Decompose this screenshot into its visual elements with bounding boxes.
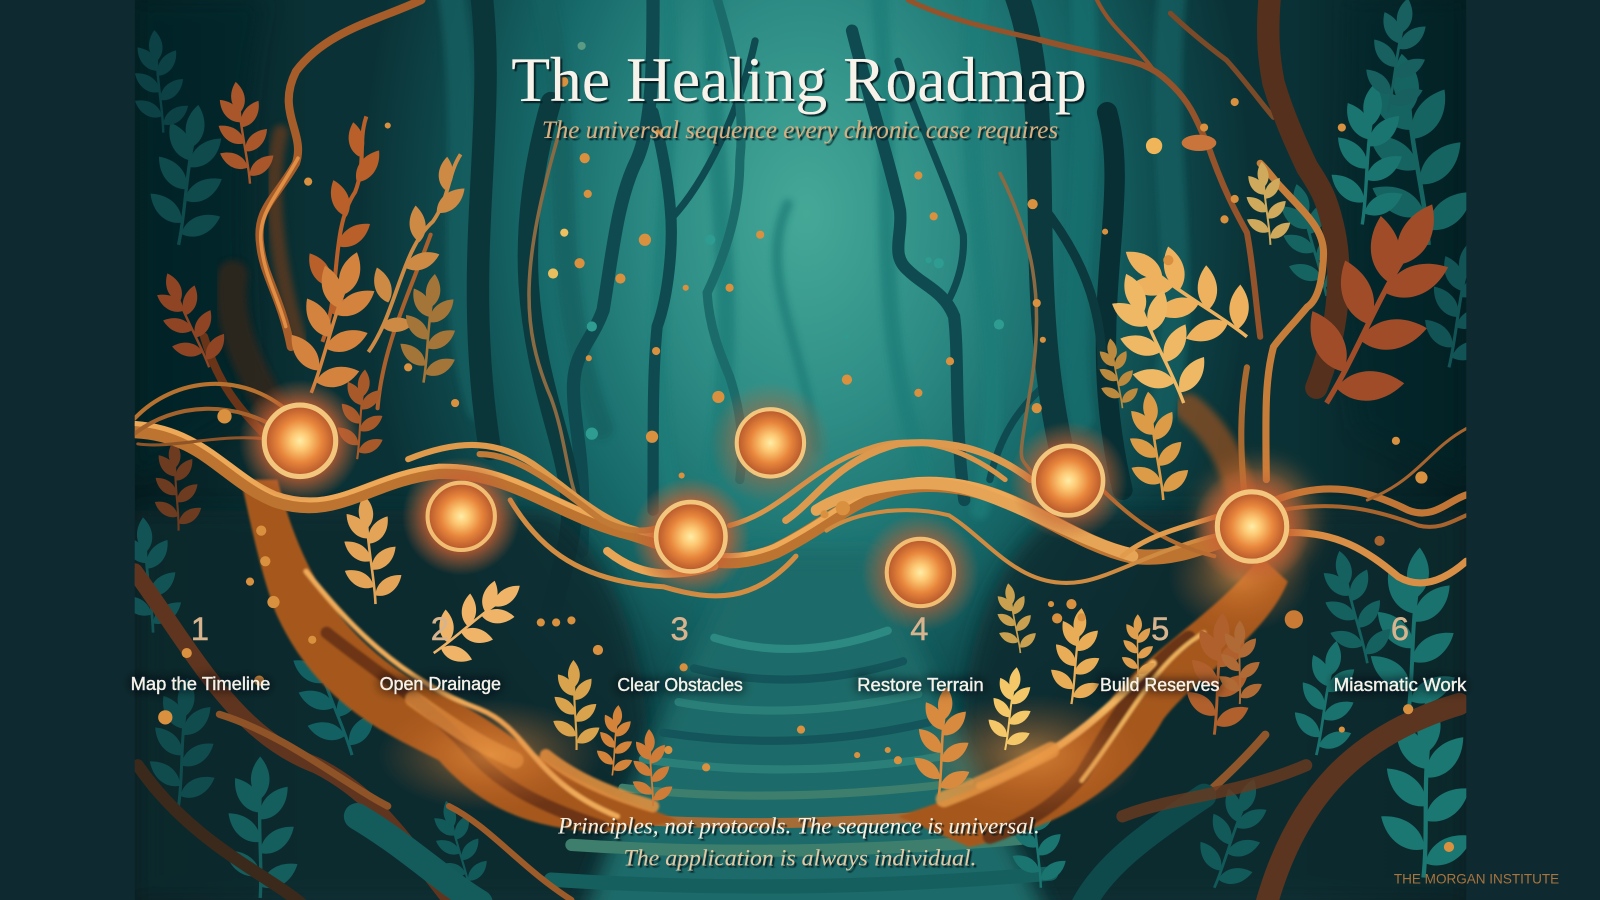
milestone orb 3 xyxy=(632,478,750,596)
distant soft trees xyxy=(449,0,1175,510)
dark forest trunks xyxy=(478,0,1122,612)
step 3: Clear Obstacles xyxy=(617,610,743,695)
step 1: Map the Timeline: Map the Timeline xyxy=(131,673,270,694)
side dark masses xyxy=(135,0,242,900)
closing statement: The application is always individual. xyxy=(623,845,977,871)
milestone orb 7 xyxy=(1193,467,1311,586)
closing statement: Principles, not protocols. The sequence is universal. xyxy=(557,814,1040,840)
winding vines path xyxy=(135,384,1466,596)
step 6: Miasmatic Work: Miasmatic Work xyxy=(1334,674,1467,695)
milestone orb 2 xyxy=(402,457,520,576)
milestone orb 5 xyxy=(861,513,980,632)
step 1: Map the Timeline xyxy=(131,610,270,694)
forest floor path xyxy=(544,607,1058,900)
left root mass xyxy=(241,480,679,832)
subtitle: The universal sequence every chronic case requires xyxy=(542,115,1058,144)
step 2: Open Drainage: 2 xyxy=(431,610,449,647)
step 4: Restore Terrain: Restore Terrain xyxy=(857,674,984,695)
milestone orb 6 xyxy=(1009,421,1128,540)
step 5: Build Reserves: Build Reserves xyxy=(1100,674,1219,695)
step 3: Clear Obstacles: Clear Obstacles xyxy=(617,674,743,695)
orb halos behind glow xyxy=(1198,461,1316,580)
title: The Healing Roadmap xyxy=(511,45,1087,115)
right root mass xyxy=(898,556,1288,847)
step 6: Miasmatic Work: 6 xyxy=(1391,610,1409,647)
step 4: Restore Terrain xyxy=(857,610,984,695)
floating light motes xyxy=(158,42,1454,852)
closing statement xyxy=(557,814,1040,871)
orange foliage xyxy=(141,78,1491,807)
step 1: Map the Timeline: 1 xyxy=(191,610,209,647)
step 5: Build Reserves: 5 xyxy=(1151,610,1169,647)
footer credit: THE MORGAN INSTITUTE xyxy=(1394,872,1559,888)
step 2: Open Drainage: Open Drainage xyxy=(380,673,501,694)
step 5: Build Reserves xyxy=(1100,610,1219,695)
step 2: Open Drainage xyxy=(380,610,501,694)
step 3: Clear Obstacles: 3 xyxy=(671,610,689,647)
step 4: Restore Terrain: 4 xyxy=(910,610,928,647)
milestone orb 4 xyxy=(709,382,832,504)
milestone orb 1 xyxy=(239,380,361,502)
step 6: Miasmatic Work xyxy=(1334,610,1467,695)
glowing embers around roots xyxy=(386,703,594,808)
